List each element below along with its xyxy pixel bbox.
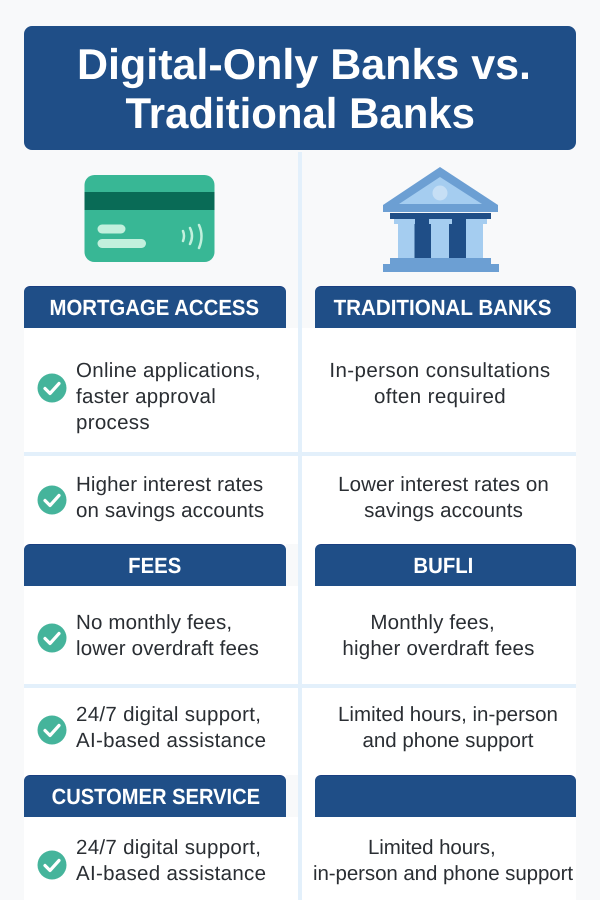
header: bufli	[315, 544, 576, 586]
text: higher interest: Higher interest rates	[76, 473, 263, 496]
header: traditional banks: TRADITIONAL BANKS	[334, 295, 552, 320]
icon: contactless card	[84, 175, 214, 262]
text: online applications	[76, 359, 261, 434]
header: empty	[315, 775, 576, 817]
text: lower interest: Lower interest rates on	[338, 473, 549, 496]
text: digital support	[76, 703, 266, 752]
text: limited hours: Limited hours, in-person	[338, 703, 558, 726]
text: digital support repeat: 24/7 digital support,	[76, 836, 261, 859]
title	[24, 26, 576, 150]
text: online applications: Online applications,	[76, 359, 261, 382]
icon: check 4	[38, 716, 66, 744]
text: limited hours repeat: Limited hours,	[368, 836, 496, 859]
header: fees	[24, 544, 286, 586]
header: customer service: CUSTOMER SERVICE	[51, 784, 260, 809]
text: in-person consultations: often required	[374, 385, 506, 408]
text: monthly fees	[342, 611, 535, 660]
text: digital support: 24/7 digital support,	[76, 703, 261, 726]
text: monthly fees: higher overdraft fees	[342, 637, 535, 660]
header: mortgage access	[24, 286, 286, 328]
text: higher interest: on savings accounts	[76, 499, 264, 522]
header: bufli: BUFLI	[414, 553, 473, 578]
text: lower interest	[338, 473, 549, 522]
text: digital support: AI-based assistance	[76, 729, 266, 752]
icon: check 3	[38, 624, 66, 652]
header: mortgage access: MORTGAGE ACCESS	[50, 295, 259, 320]
text: limited hours	[338, 703, 558, 752]
text: in-person consultations	[329, 359, 551, 408]
header: fees: FEES	[128, 553, 182, 578]
text: higher interest	[76, 473, 264, 522]
text: limited hours repeat	[313, 836, 573, 885]
text: limited hours repeat: in-person and phone support	[313, 862, 573, 885]
text: monthly fees: Monthly fees,	[370, 611, 495, 634]
icon: check 1	[38, 374, 66, 402]
text: lower interest: savings accounts	[364, 499, 523, 522]
icon: check 2	[38, 486, 66, 514]
panel: right column body	[302, 328, 576, 900]
text: no monthly fees: No monthly fees,	[76, 611, 232, 634]
icon: bank building	[383, 167, 499, 272]
text: digital support repeat: AI-based assistance	[76, 862, 266, 885]
icon: check 5	[38, 850, 66, 880]
text: online applications: faster approval	[76, 385, 216, 408]
title: Traditional Banks	[125, 90, 475, 138]
text: in-person consultations: In-person consultations	[329, 359, 551, 382]
title: Digital-Only Banks vs.	[77, 41, 531, 89]
text: no monthly fees: lower overdraft fees	[76, 637, 259, 660]
divider: vertical column separator	[298, 152, 302, 900]
header: customer service	[24, 775, 286, 817]
panel: left column body	[24, 328, 298, 900]
header: traditional banks	[315, 286, 576, 328]
text: limited hours: and phone support	[362, 729, 533, 752]
text: online applications: process	[76, 411, 150, 434]
text: no monthly fees	[76, 611, 259, 660]
text: digital support repeat	[76, 836, 266, 885]
